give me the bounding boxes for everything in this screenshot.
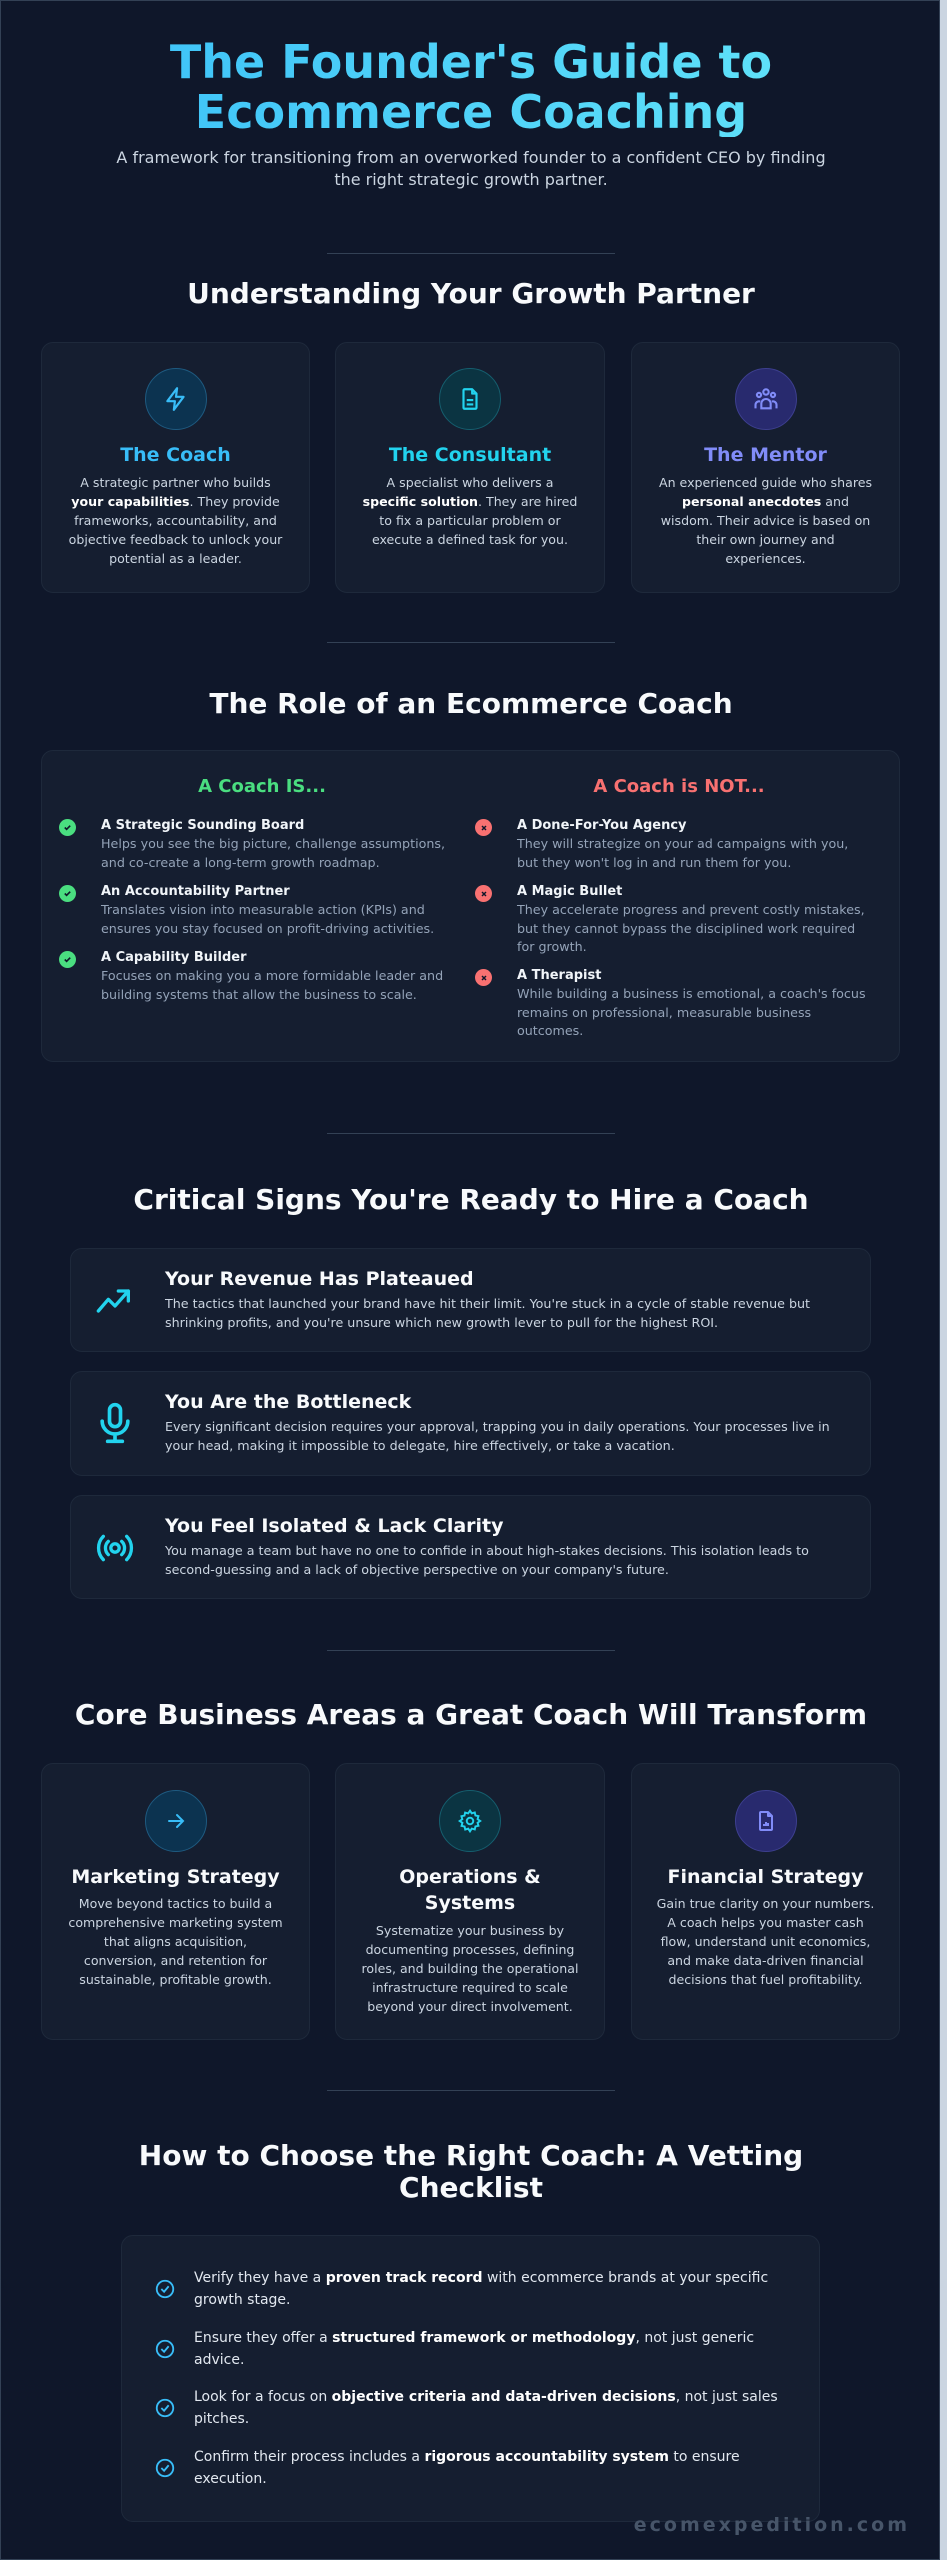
item: capability builder: [59, 950, 443, 1002]
heading: a coach is not: A Coach is NOT...: [593, 776, 765, 797]
footer brand: ecomexpedition.com: [634, 2514, 910, 2536]
heading: a coach is: A Coach IS...: [198, 776, 326, 797]
item: accountability partner: An Accountability Partner: [101, 884, 290, 899]
item: therapist: While building a business is emotional, a coach's focus remains on professional, measurable business outcomes.: [517, 986, 866, 1038]
icon: microphone: [100, 1402, 130, 1444]
card title: Operations & Systems: [399, 1866, 541, 1914]
checklist item 3: Look for a focus on objective criteria and data-driven decisions, not just sales pitches.: [194, 2389, 778, 2427]
panel: isolated: [70, 1495, 871, 1599]
panel: revenue plateaued: [70, 1248, 871, 1352]
item: sounding board: [59, 818, 445, 870]
checklist item 1: Verify they have a proven track record with ecommerce brands at your specific growth stage.: [194, 2270, 768, 2308]
panel: coach is / is not: [41, 750, 900, 1062]
card text: An experienced guide who shares personal anecdotes and wisdom. Their advice is based on their own journey and experiences.: [659, 475, 872, 566]
card title: Financial Strategy: [667, 1866, 864, 1888]
item: capability builder: A Capability Builder: [101, 950, 246, 965]
item: sounding board: A Strategic Sounding Board: [101, 818, 304, 833]
item: accountability partner: [59, 884, 434, 936]
heading: critical signs: Critical Signs You're Ready to Hire a Coach: [133, 1183, 809, 1216]
checklist item 4: Confirm their process includes a rigorous accountability system to ensure execution.: [194, 2449, 740, 2487]
card text: Gain true clarity on your numbers. A coach helps you master cash flow, understand unit economics, and make data-driven financial decisions that fuel profitability.: [657, 1896, 874, 1987]
icon: group: [735, 368, 797, 430]
icon: document: [439, 368, 501, 430]
card text: Systematize your business by documenting processes, defining roles, and building the operational infrastructure required to scale beyond your direct involvement.: [362, 1923, 578, 2014]
title: Ecommerce Coaching: [195, 85, 747, 139]
panel: operations: [335, 1763, 605, 2040]
item: magic bullet: They accelerate progress and prevent costly mistakes, but they cannot bypass the disciplined work required for growth.: [517, 902, 865, 954]
heading: understanding your growth partner: Understanding Your Growth Partner: [187, 277, 755, 310]
item: capability builder: Focuses on making you a more formidable leader and building systems that allow the business to scale.: [101, 968, 443, 1002]
card text: A strategic partner who builds your capabilities. They provide frameworks, accountability, and objective feedback to unlock your potential as a leader.: [69, 475, 282, 566]
icon: broadcast: [96, 1534, 134, 1562]
icon: report: [735, 1790, 797, 1852]
panel: marketing strategy: [41, 1763, 310, 2040]
panel: the consultant: [335, 342, 605, 593]
heading: core business areas: Core Business Areas a Great Coach Will Transform: [75, 1698, 867, 1731]
icon: gear: [439, 1790, 501, 1852]
item: sounding board: Helps you see the big picture, challenge assumptions, and co-create a long-term growth roadmap.: [101, 836, 445, 870]
heading: vetting checklist: How to Choose the Right Coach: A Vetting Checklist: [139, 2139, 803, 2204]
title: The Founder's Guide to: [170, 35, 772, 89]
panel: financial strategy: [631, 1763, 900, 2040]
item: therapist: [475, 968, 866, 1038]
panel: revenue plateaued: Your Revenue Has Plateaued: [165, 1268, 474, 1290]
panel: checklist: [121, 2235, 820, 2522]
subtitle: A framework for transitioning from an overworked founder to a confident CEO by finding the right strategic growth partner.: [116, 148, 826, 189]
item: agency: They will strategize on your ad campaigns with you, but they won't log in and run them for you.: [517, 836, 848, 870]
card title: The Coach: [120, 444, 231, 466]
icon: trend: [96, 1289, 130, 1313]
panel: the mentor: [631, 342, 900, 593]
card title: The Consultant: [389, 444, 551, 466]
panel: isolated: You Feel Isolated & Lack Clarity: [165, 1515, 504, 1537]
panel: bottleneck: [70, 1371, 871, 1476]
panel: bottleneck: You Are the Bottleneck: [165, 1391, 411, 1413]
card text: A specialist who delivers a specific solution. They are hired to fix a particular problem or execute a defined task for you.: [363, 475, 577, 547]
item: magic bullet: [475, 884, 865, 954]
item: magic bullet: A Magic Bullet: [517, 884, 622, 899]
panel: revenue plateaued: The tactics that launched your brand have hit their limit. You're stuck in a cycle of stable revenue but shrinking profits, and you're unsure which new growth lever to pull for the highest ROI.: [165, 1296, 810, 1330]
item: agency: [475, 818, 848, 870]
panel: isolated: You manage a team but have no one to confide in about high-stakes decisions. This isolation leads to second-guessing and a lack of objective perspective on your company's future.: [165, 1543, 809, 1577]
item: accountability partner: Translates vision into measurable action (KPIs) and ensures you stay focused on profit-driving activities.: [101, 902, 434, 936]
checklist item 2: Ensure they offer a structured framework or methodology, not just generic advice.: [194, 2330, 754, 2368]
icon: lightning: [145, 368, 207, 430]
item: agency: A Done-For-You Agency: [517, 818, 687, 833]
heading: role of a coach: The Role of an Ecommerce Coach: [209, 687, 733, 720]
card text: Move beyond tactics to build a comprehensive marketing system that aligns acquisition, conversion, and retention for sustainable, profitable growth.: [68, 1896, 283, 1987]
card title: Marketing Strategy: [71, 1866, 280, 1888]
card title: The Mentor: [704, 444, 827, 466]
icon: arrow: [145, 1790, 207, 1852]
panel: bottleneck: Every significant decision requires your approval, trapping you in daily operations. Your processes live in your head, making it impossible to delegate, hire effectively, or take a vacation.: [165, 1419, 830, 1453]
panel: the coach: [41, 342, 310, 593]
item: therapist: A Therapist: [517, 968, 601, 983]
title: [1, 37, 941, 137]
